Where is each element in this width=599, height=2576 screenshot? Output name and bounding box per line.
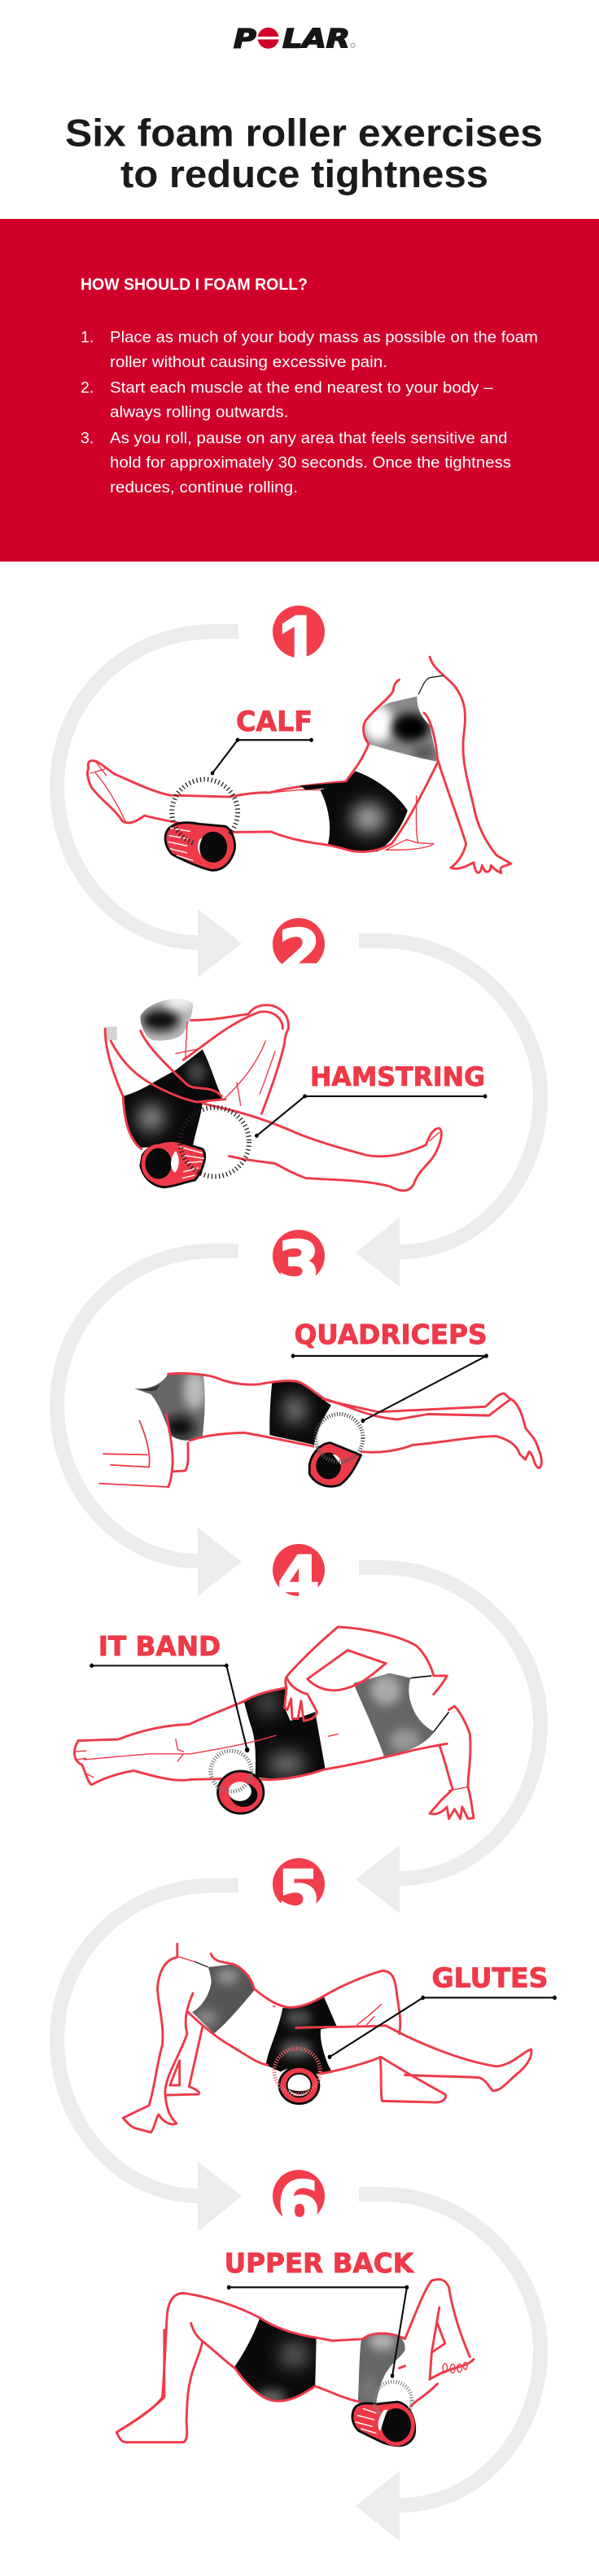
- shorts: [265, 1997, 337, 2075]
- number badge 4: 4: [278, 1544, 320, 1614]
- panel heading: HOW SHOULD I FOAM ROLL?: [81, 276, 308, 294]
- instruction list: Start each muscle at the end nearest to your body –: [110, 379, 493, 397]
- shorts: [244, 1689, 326, 1778]
- instruction list: 2.: [81, 379, 94, 397]
- instruction list: roller without causing excessive pain.: [110, 353, 387, 371]
- upper body shading: [358, 2333, 405, 2403]
- upper body shading: [140, 999, 193, 1041]
- leader: hamstring: [255, 1094, 487, 1138]
- instruction list: reduces, continue rolling.: [110, 479, 298, 496]
- arrow: step 5 to 6: [57, 1885, 242, 2232]
- instruction list: [81, 329, 538, 496]
- instruction list: As you roll, pause on any area that feels sensitive and: [110, 430, 508, 448]
- label: upper back: UPPER BACK: [225, 2247, 414, 2279]
- exercise 2: hamstring figure: [105, 993, 487, 1191]
- exercise 3: quadriceps figure: [99, 1354, 541, 1487]
- number badge 5: 5: [278, 1858, 320, 1928]
- shorts: [321, 772, 408, 852]
- exercise 4: IT band figure: [74, 1627, 474, 1819]
- number badge 3: 3: [278, 1229, 320, 1299]
- leader: quadriceps: [291, 1354, 488, 1423]
- foam roller: [141, 1108, 249, 1187]
- label: glutes: GLUTES: [431, 1962, 549, 1994]
- exercise 6: upper back figure: [116, 2280, 474, 2446]
- arrow: step 1 to 2: [57, 632, 242, 977]
- foam roller: [274, 2049, 320, 2104]
- foam roller: [309, 1414, 363, 1486]
- number badge 2: 2: [278, 917, 321, 987]
- number badge 6: 6: [278, 2169, 320, 2239]
- body outline: [116, 2280, 474, 2443]
- foam roller: [165, 780, 238, 870]
- upper body shading: [135, 1374, 205, 1441]
- leader: upper back: [227, 2285, 409, 2378]
- leader: IT band: [90, 1664, 250, 1752]
- arrow: step 2 to 3: [356, 941, 540, 1287]
- number badge 1: 1: [278, 601, 319, 683]
- upper body shading: [365, 697, 437, 762]
- foam roller: [352, 2381, 415, 2446]
- exercise 1: calf figure: [88, 657, 511, 873]
- upper body shading: [353, 1673, 435, 1756]
- body outline: [99, 1373, 541, 1487]
- arrow: step 3 to 4: [57, 1251, 242, 1596]
- label: hamstring: HAMSTRING: [310, 1061, 485, 1092]
- logo: Polar: POLAR: [234, 23, 350, 54]
- body outline: [105, 1005, 441, 1191]
- body outline: [74, 1627, 474, 1819]
- shorts: [269, 1382, 331, 1445]
- shorts: [124, 1049, 223, 1148]
- label: quadriceps: QUADRICEPS: [295, 1319, 487, 1350]
- title: to reduce tightness: [120, 152, 488, 195]
- panel: how to foam roll: [0, 219, 599, 562]
- instruction list: always rolling outwards.: [110, 404, 288, 422]
- body outline: [123, 1944, 531, 2132]
- shorts: [234, 2319, 317, 2399]
- instruction list: hold for approximately 30 seconds. Once the tightness: [110, 454, 511, 472]
- upper body shading: [192, 1965, 254, 2033]
- instruction list: 3.: [81, 430, 94, 448]
- body outline: [88, 657, 511, 873]
- title: Six foam roller exercises: [65, 111, 543, 155]
- label: calf: CALF: [236, 706, 313, 737]
- instruction list: Place as much of your body mass as possible on the foam: [110, 329, 538, 347]
- label: IT band: IT BAND: [98, 1630, 221, 1662]
- title: [65, 111, 543, 195]
- arrow: step 6 onward: [356, 2194, 540, 2541]
- exercise 5: glutes figure: [123, 1944, 557, 2132]
- arrow: step 4 to 5: [356, 1568, 540, 1913]
- leader: calf: [211, 738, 313, 776]
- leader: glutes: [328, 1996, 557, 2059]
- foam roller: [211, 1751, 264, 1813]
- instruction list: 1.: [81, 329, 94, 347]
